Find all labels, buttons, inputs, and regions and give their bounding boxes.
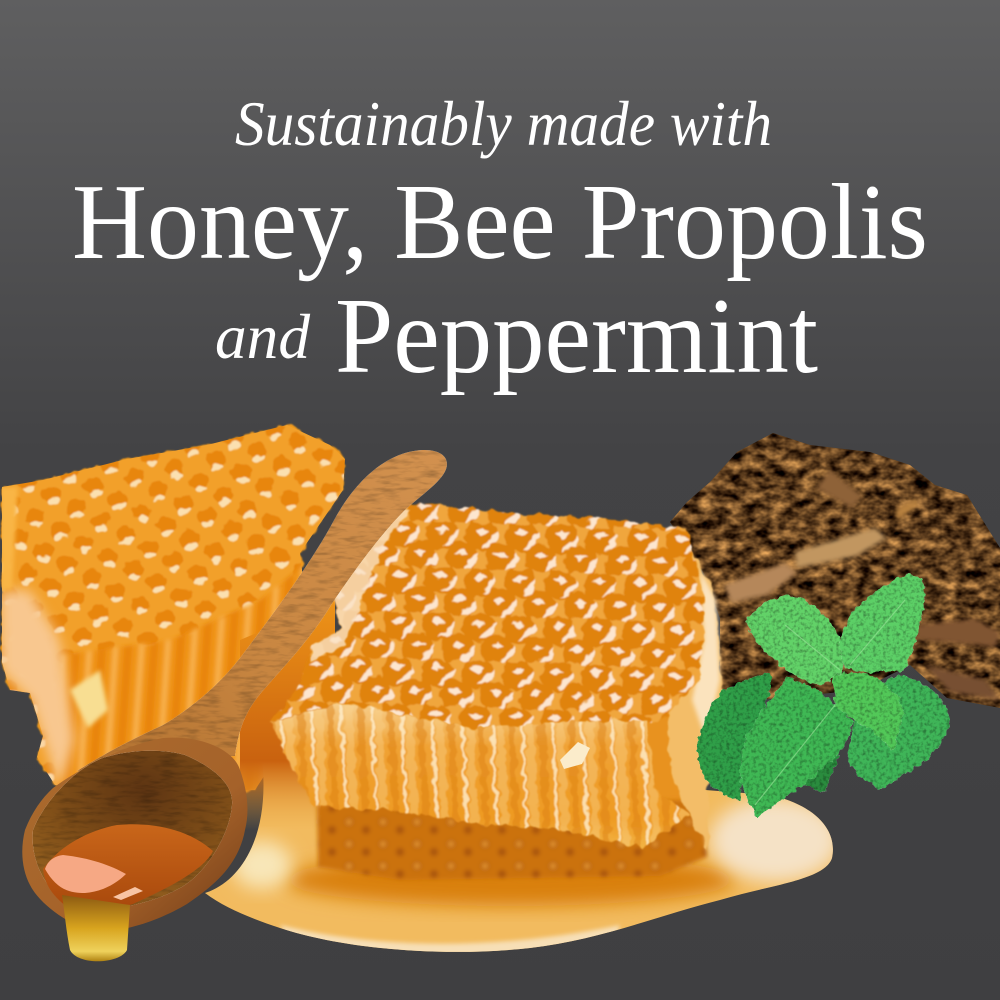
propolis highlight shards <box>725 470 1000 700</box>
heading line: Peppermint: Peppermint <box>335 277 818 396</box>
puddle: orange pool <box>285 854 735 906</box>
comb: pale right wall <box>665 530 723 850</box>
mint leaf vein <box>755 600 905 805</box>
heading line: Sustainably made with: Sustainably made with <box>235 88 772 159</box>
central honeycomb <box>270 503 723 880</box>
comb: pale left edge <box>312 507 410 660</box>
propolis pile <box>670 433 1000 708</box>
comb: top hexagon face <box>270 503 704 728</box>
mint leaf: right <box>847 675 950 788</box>
puddle: dark honey behind spoon <box>240 600 335 830</box>
mint leaf: lower left <box>697 673 770 800</box>
honey puddle <box>205 600 840 960</box>
honey drip <box>62 895 130 961</box>
comb: ribbed front face <box>270 703 690 847</box>
mint leaf: centre bright <box>833 673 903 750</box>
spoon bowl <box>22 738 247 931</box>
honey in spoon <box>43 824 213 910</box>
title <box>72 88 928 396</box>
wooden spoon <box>22 450 447 961</box>
spoon handle <box>77 450 447 771</box>
mint sprig <box>697 575 950 818</box>
comb: wax fleck <box>560 742 590 769</box>
heading line: and: and <box>215 301 311 372</box>
mint leaf: small under <box>803 755 840 793</box>
mint leaf: upper right <box>840 575 925 672</box>
comb: amber backing <box>320 600 705 830</box>
comb: lower ribbed wall <box>55 560 310 790</box>
heading line: Honey, Bee Propolis: Honey, Bee Propolis <box>72 163 928 282</box>
comb: bottom bubbled layer <box>317 800 707 880</box>
mint leaf: lower centre <box>740 678 853 818</box>
comb: pale left edge <box>0 590 75 790</box>
puddle: pale bottom edge <box>279 923 622 952</box>
mint leaf: upper left <box>745 596 843 685</box>
left honeycomb <box>0 420 350 800</box>
puddle: pale right side <box>710 798 840 882</box>
puddle: pale left side <box>232 841 292 889</box>
